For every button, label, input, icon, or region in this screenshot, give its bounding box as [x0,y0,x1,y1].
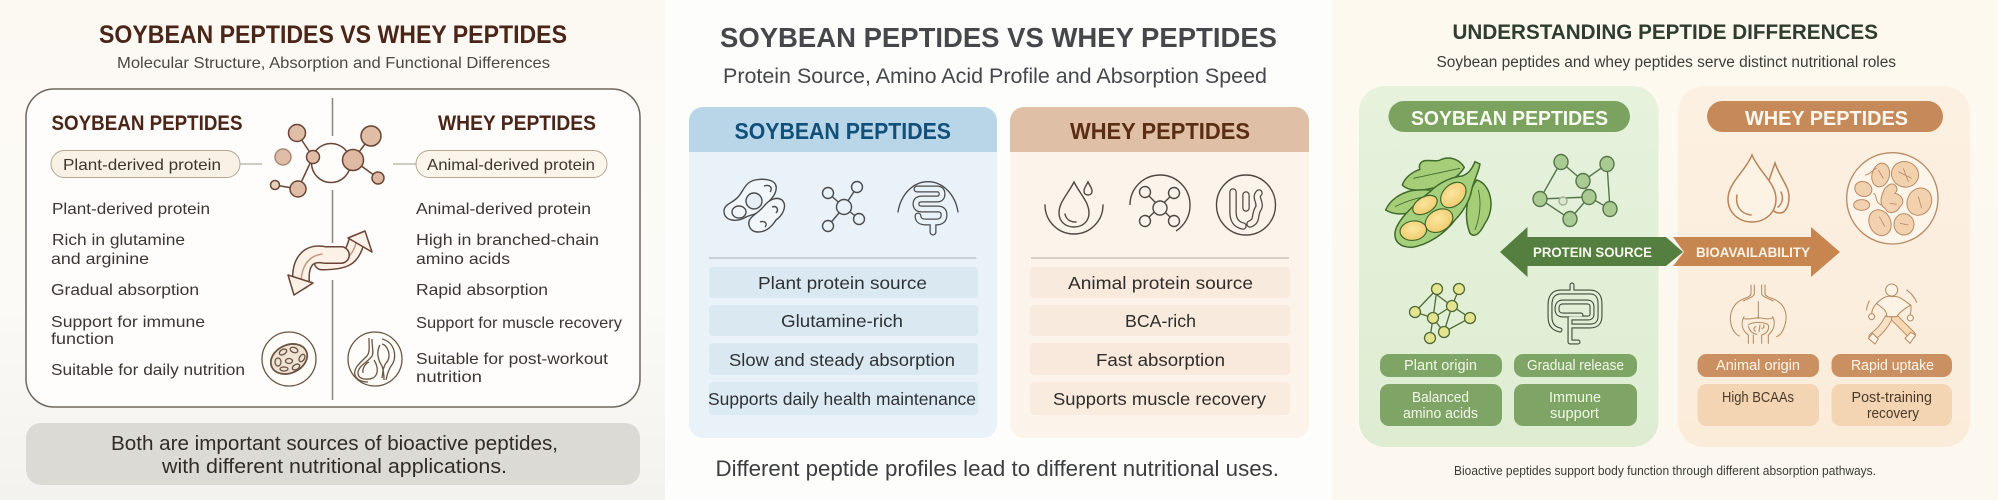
rows: soybean features: Supports daily health maintenance [708,389,976,409]
pill: whey peptides [1707,101,1943,132]
icon: crossing absorption arrows [288,231,372,295]
icon: running figure [1867,284,1917,344]
labels: whey attributes: recovery [1867,406,1920,422]
arrow: protein source [1500,227,1683,277]
footer note: Different peptide profiles lead to different nutritional uses. [716,456,1279,481]
arrow: bioavailability [1673,227,1840,277]
icon: digestive tract [898,182,958,232]
icon: green molecule network [1533,154,1617,226]
icon: whey droplets [1728,155,1789,222]
list: whey properties: Support for muscle recovery [416,315,622,332]
icon: muscle fibers [1216,175,1276,235]
list: soybean properties: Rich in glutamine [52,232,185,249]
labels: whey attributes: Rapid uptake [1851,358,1934,374]
list: soybean properties: Support for immune [51,314,205,331]
icon: soybean pods [724,179,784,232]
subtitle: Soybean peptides and whey peptides serve distinct nutritional roles [1436,54,1896,71]
center divider [332,98,334,400]
labels: soybean attributes: Gradual release [1527,358,1624,374]
labels: soybean attributes: Balanced [1412,390,1469,406]
title: SOYBEAN PEPTIDES VS WHEY PEPTIDES [720,22,1277,53]
rows: soybean features: Glutamine-rich [781,311,903,331]
icon: muscle fibers [348,332,402,386]
labels: whey attributes: Post-training [1852,390,1932,406]
list: whey properties: High in branched-chain [416,232,599,249]
list: soybean properties [51,201,245,379]
icon: protein cell cluster [1847,153,1938,244]
rows: soybean features [708,267,978,415]
title: SOYBEAN PEPTIDES VS WHEY PEPTIDES [99,21,567,49]
pill: soybean peptides: SOYBEAN PEPTIDES [1411,108,1608,130]
footer note: Bioactive peptides support body function through different absorption pathways. [1454,463,1876,478]
subtitle: Protein Source, Amino Acid Profile and Absorption Speed [723,65,1267,88]
card: whey [1678,86,1970,447]
pill: soybean peptides [1388,101,1630,132]
icon: muscular torso [1730,285,1786,343]
rows: whey features [1030,267,1290,415]
rows: whey features: BCA-rich [1125,311,1196,331]
heading: soybean: SOYBEAN PEPTIDES [734,118,951,144]
callout: summary: Both are important sources of bioactive peptides, [111,433,558,455]
list: soybean properties: Gradual absorption [51,282,199,299]
rows: whey features: Supports muscle recovery [1053,389,1266,409]
icon: whey molecule [1130,175,1190,231]
list: whey properties: Suitable for post-workout [416,351,609,368]
rows: whey features: Fast absorption [1096,350,1225,370]
heading: soybean peptides: SOYBEAN PEPTIDES [52,112,242,135]
list: whey properties: Animal-derived protein [416,201,591,218]
labels: whey attributes: High BCAAs [1722,390,1794,406]
pill: animal-derived protein: Animal-derived protein [427,157,595,174]
comparison card [26,89,640,407]
labels: soybean attributes: amino acids [1403,406,1478,422]
list: soybean properties: Plant-derived protein [52,201,210,218]
panel: molecular structure comparison [0,0,665,500]
list: soybean properties: Suitable for daily nutrition [51,362,245,379]
panel: understanding peptide differences [1332,0,1998,500]
rows: soybean features: Plant protein source [758,273,927,293]
rows: whey features: Animal protein source [1068,273,1253,293]
labels: soybean attributes: support [1550,406,1599,422]
icon: soybean pod [1386,158,1491,247]
pill: animal-derived protein [393,150,607,178]
subtitle: Molecular Structure, Absorption and Functional Differences [117,55,550,72]
list: whey properties: nutrition [416,369,482,386]
heading: whey: WHEY PEPTIDES [1070,118,1250,144]
labels: whey attributes [1698,354,1952,426]
icon: peptide molecule [270,124,384,197]
list: soybean properties: and arginine [51,251,149,268]
card: soybean [1359,86,1658,447]
labels: soybean attributes [1380,354,1637,426]
callout: summary [26,423,640,485]
arrow: protein source: PROTEIN SOURCE [1533,245,1652,260]
panel: protein source comparison [665,0,1332,500]
pill: plant-derived protein [51,150,262,178]
arrow: bioavailability: BIOAVAILABILITY [1696,245,1810,260]
list: whey properties: Rapid absorption [416,282,548,299]
divider [1031,257,1289,259]
callout: summary: with different nutritional applications. [161,456,507,478]
icon: molecule [822,182,864,232]
title: UNDERSTANDING PEPTIDE DIFFERENCES [1452,21,1878,44]
pill: plant-derived protein: Plant-derived protein [63,157,221,174]
heading: whey peptides: WHEY PEPTIDES [438,112,596,135]
labels: whey attributes: Animal origin [1716,358,1800,374]
icon: plant cell [262,332,316,386]
divider [709,257,976,259]
card: soybean [689,107,997,438]
icon: intestine [1550,285,1600,342]
card: whey [1010,107,1309,438]
labels: soybean attributes: Plant origin [1404,358,1477,374]
list: whey properties: amino acids [416,251,510,268]
rows: soybean features: Slow and steady absorption [729,350,955,370]
labels: soybean attributes: Immune [1549,390,1601,406]
icon: yellow amino acid network [1410,284,1476,344]
list: whey properties [416,201,622,386]
list: soybean properties: function [51,331,114,348]
icon: whey drop [1045,182,1103,234]
pill: whey peptides: WHEY PEPTIDES [1745,108,1908,130]
